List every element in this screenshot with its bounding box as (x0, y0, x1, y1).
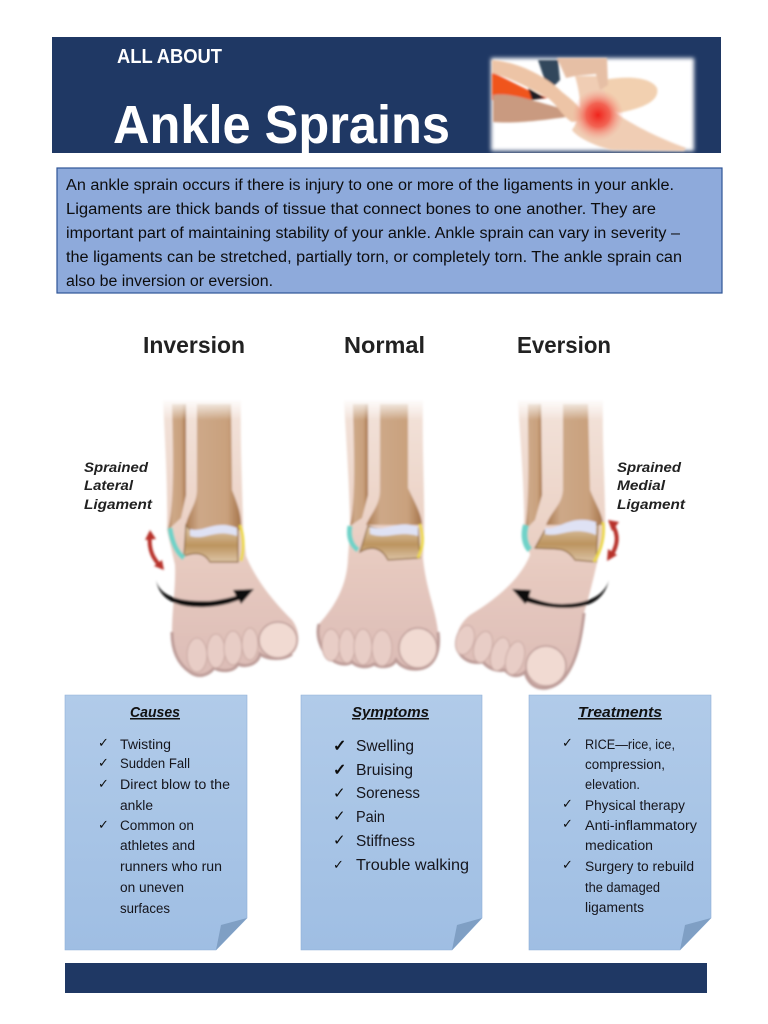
label: sprained lateral ligament: Lateral (84, 477, 134, 493)
checklist (333, 738, 469, 874)
checklist: ✓ (562, 796, 573, 811)
checklist: Direct blow to the (120, 777, 230, 792)
intro text panel: the ligaments can be stretched, partially torn, or completely torn. The ankle sprain can (66, 249, 682, 266)
checklist: compression, (585, 757, 665, 772)
checklist: ✓ (98, 755, 109, 770)
arrow: red double (611, 524, 617, 556)
page fold (452, 918, 482, 950)
foot: eversion (452, 398, 619, 688)
heading: Causes (130, 704, 180, 721)
checklist: Anti-inflammatory (585, 818, 697, 833)
panel: symptoms (301, 695, 482, 950)
heading: Treatments (578, 704, 662, 721)
panel: treatments (529, 695, 711, 950)
checklist: RICE—rice, ice, (585, 737, 675, 752)
checklist: runners who run (120, 859, 222, 874)
label: sprained medial ligament: Ligament (617, 496, 686, 512)
heading: Inversion: Inversion (143, 332, 245, 358)
title: Ankle Sprains (113, 95, 450, 155)
checklist: Pain (356, 809, 385, 826)
label: sprained lateral ligament: Ligament (84, 496, 153, 512)
foot: normal (318, 398, 439, 669)
header banner (52, 37, 721, 155)
checklist: the damaged (585, 880, 660, 895)
arrow: curved black (156, 580, 254, 607)
checklist: Soreness (356, 785, 420, 802)
checklist: Physical therapy (585, 798, 685, 813)
checklist: ✓ (562, 816, 573, 831)
intro text panel: important part of maintaining stability of your ankle. Ankle sprain can vary in severity – (66, 225, 680, 242)
label: sprained lateral ligament: Sprained (84, 459, 148, 475)
checklist: ligaments (585, 900, 644, 915)
checklist: Common on (120, 818, 194, 833)
checklist: ✓ (98, 776, 109, 791)
label: sprained medial ligament: Sprained (617, 459, 681, 475)
checklist: surfaces (120, 901, 170, 916)
checklist: ✓ (333, 832, 346, 849)
label: sprained lateral ligament (84, 459, 153, 512)
checklist: ✓ (333, 857, 344, 872)
checklist: Stiffness (356, 833, 415, 850)
intro text panel (57, 168, 722, 293)
checklist: ✓ (98, 817, 109, 832)
checklist: ankle (120, 798, 153, 813)
checklist: ✓ (98, 735, 109, 750)
page fold (216, 918, 247, 950)
intro text panel: Ligaments are thick bands of tissue that connect bones to one another. They are (66, 201, 656, 218)
foot: inversion (145, 398, 298, 675)
checklist: ✓ (562, 857, 573, 872)
checklist: ✓ (333, 808, 346, 825)
checklist (562, 735, 697, 915)
ankle illustration: inversion, normal, eversion (84, 332, 686, 688)
checklist (98, 735, 230, 916)
checklist: Sudden Fall (120, 756, 190, 771)
checklist: Bruising (356, 762, 413, 779)
checklist: athletes and (120, 838, 195, 853)
photo: ankle held in hands with red pain spot (491, 58, 694, 151)
intro text panel: An ankle sprain occurs if there is injury to one or more of the ligaments in your ankle. (66, 177, 674, 194)
checklist: Surgery to rebuild (585, 859, 694, 874)
panel: causes (65, 695, 247, 950)
intro text panel: also be inversion or eversion. (66, 273, 273, 290)
checklist: Twisting (120, 737, 171, 752)
checklist: Trouble walking (356, 857, 469, 874)
checklist: Swelling (356, 738, 414, 755)
checklist: ✓ (333, 785, 346, 802)
label: sprained medial ligament: Medial (617, 477, 666, 493)
heading: Symptoms (352, 704, 429, 721)
arrow: red double (150, 535, 160, 566)
checklist: ✓ (333, 762, 346, 779)
checklist: elevation. (585, 777, 640, 792)
subheading: ALL ABOUT (117, 45, 222, 68)
label: sprained medial ligament (617, 459, 686, 512)
footer bar (65, 963, 707, 993)
page fold (680, 918, 711, 950)
checklist: medication (585, 838, 653, 853)
heading: Eversion: Eversion (517, 332, 611, 358)
heading: Normal: Normal (344, 332, 425, 358)
checklist: ✓ (562, 735, 573, 750)
checklist: ✓ (333, 738, 346, 755)
arrow: curved black (512, 580, 609, 608)
checklist: on uneven (120, 880, 184, 895)
